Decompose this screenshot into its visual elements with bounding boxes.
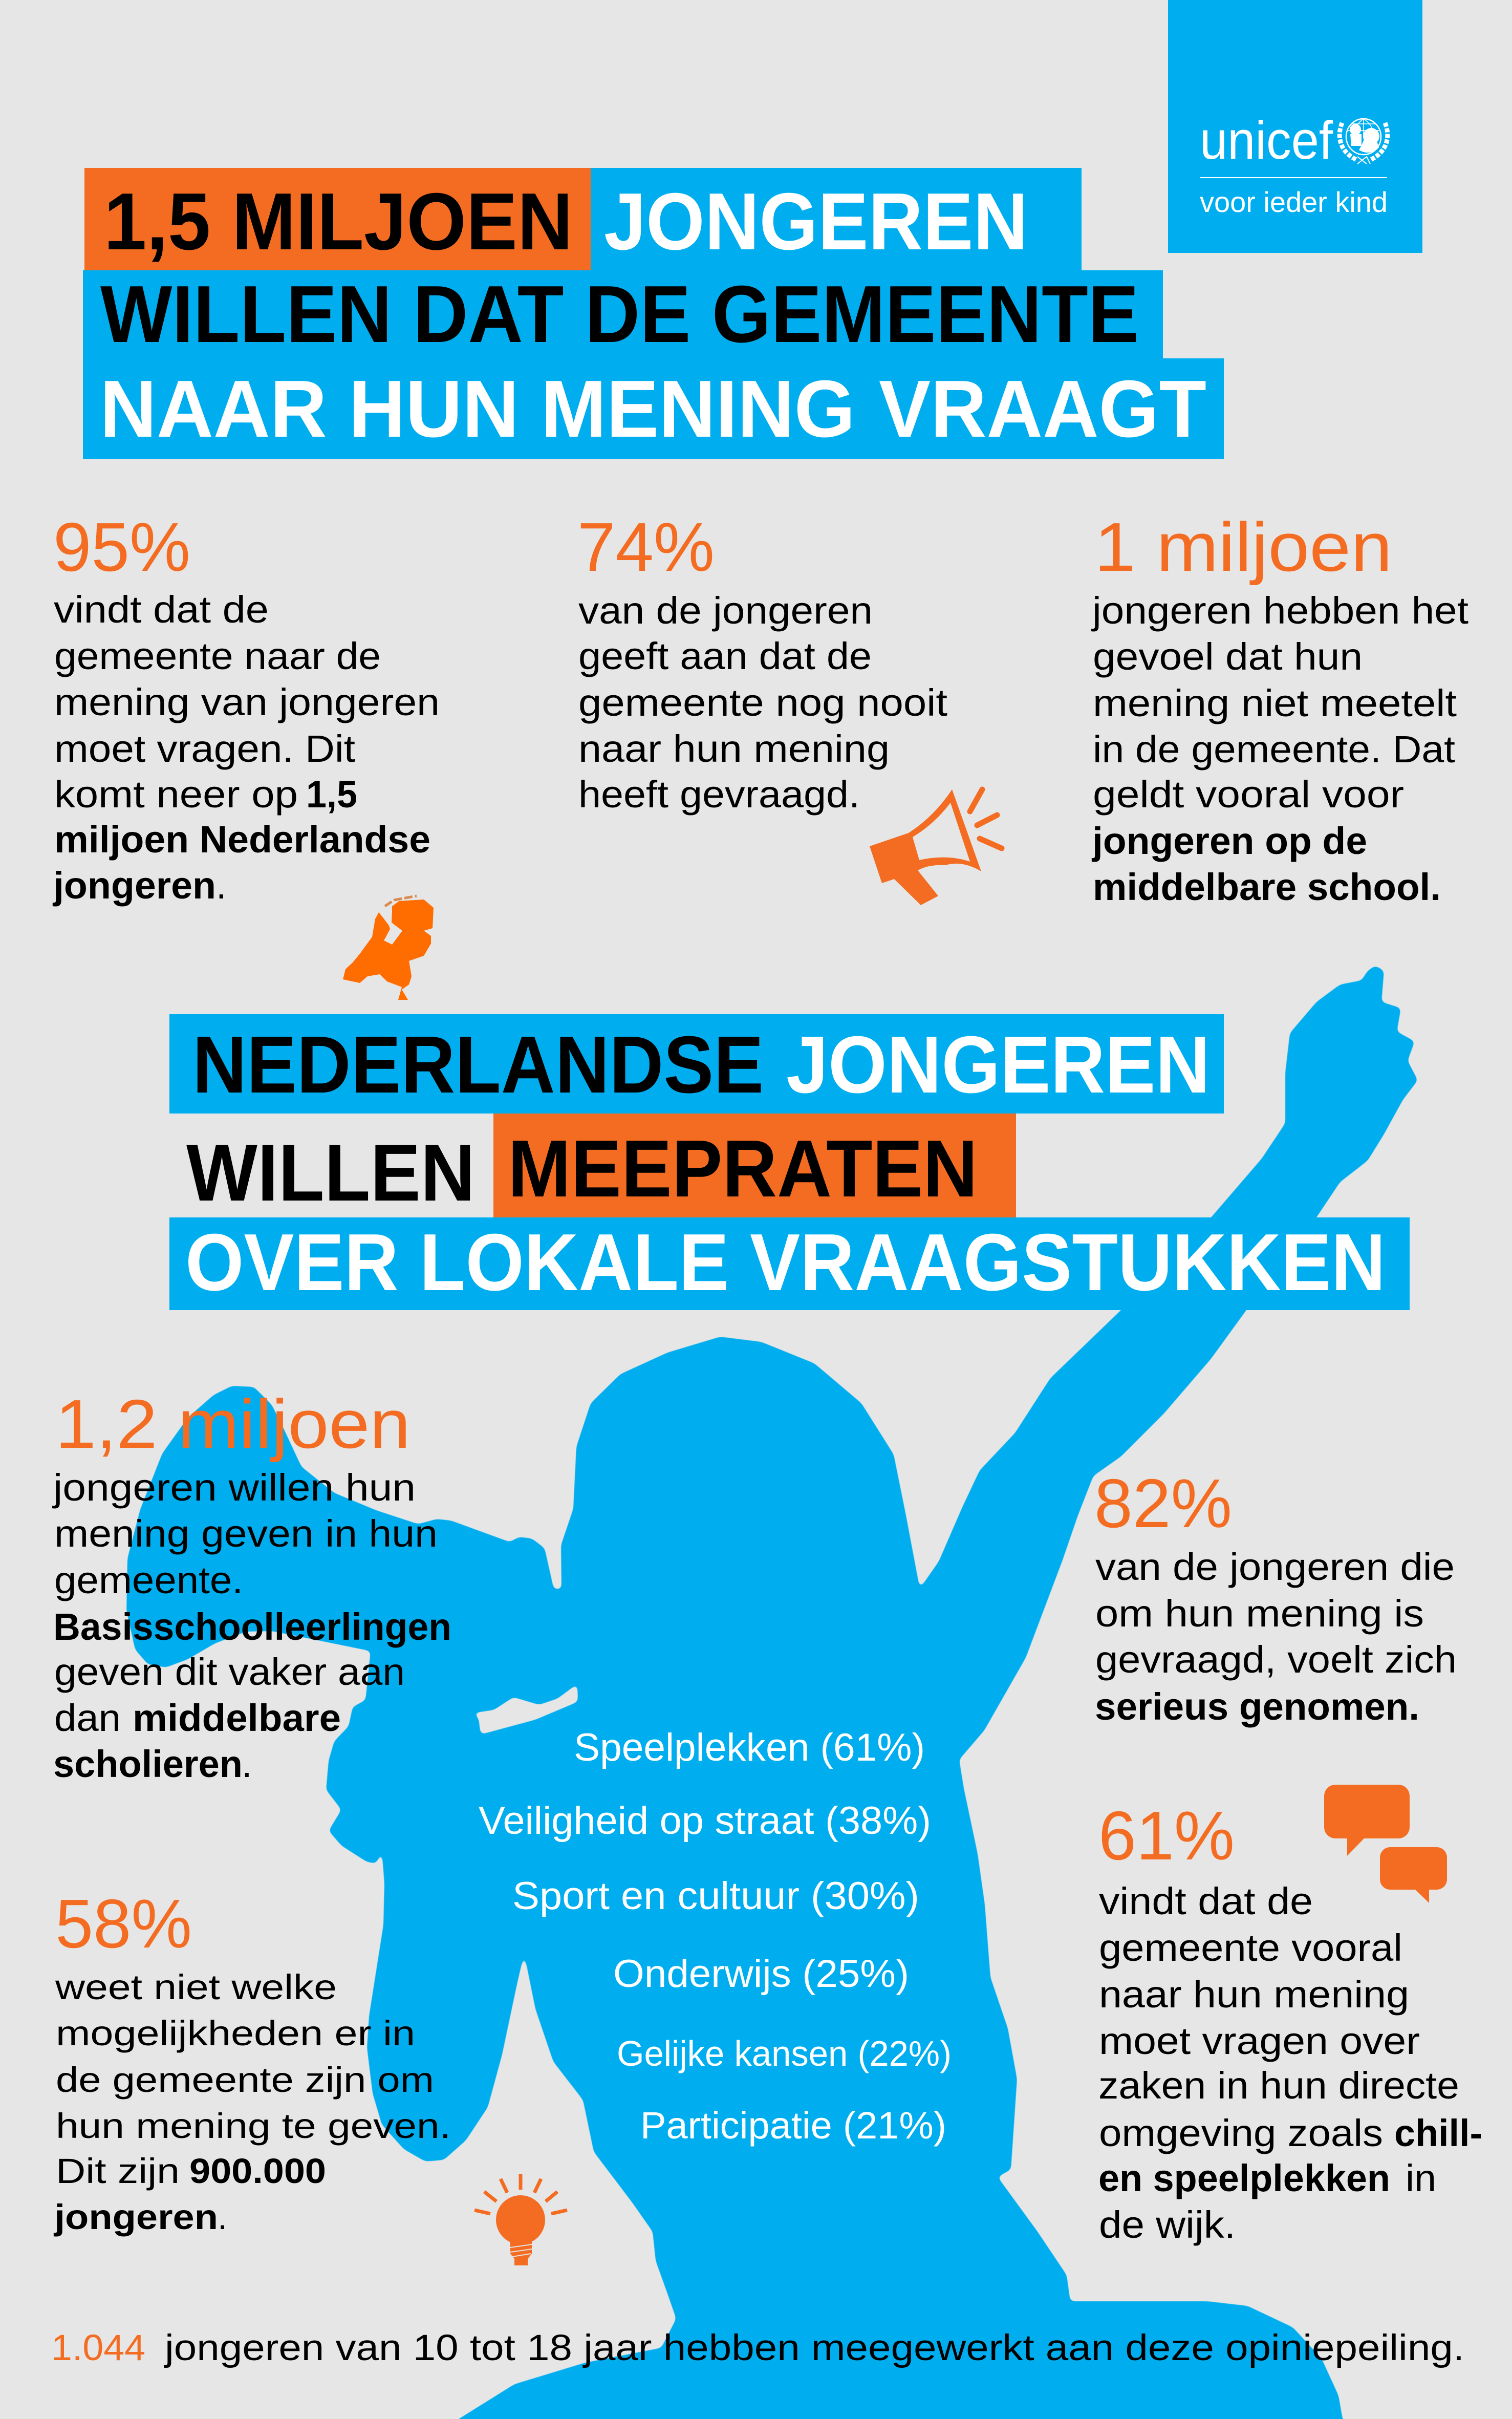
icon: light bulb (474, 2174, 567, 2265)
stat 1 miljoen body text: jongeren hebben het (1091, 589, 1468, 632)
title line 1 (104, 177, 1028, 267)
stat: 1,2 miljoen: 1,2 miljoen (55, 1385, 411, 1463)
stat 58% body text: jongeren (53, 2197, 218, 2237)
stat 1,2 miljoen body text: geven dit vaker aan (54, 1651, 405, 1693)
stat 1 miljoen body text: geldt vooral voor (1093, 773, 1404, 816)
stat 1,2 miljoen body text (52, 1466, 451, 1785)
stat 74% body text: van de jongeren (578, 589, 873, 632)
stat: 61%: 61% (1098, 1797, 1235, 1874)
stat 58% body text (53, 1967, 451, 2237)
stat: 58% (53, 1885, 451, 2237)
title banner (83, 168, 1224, 459)
silhouette: jumping child with megaphone (126, 966, 1418, 2419)
stat 95% body text (52, 588, 440, 907)
stat 95% body text: miljoen Nederlandse (54, 818, 430, 861)
stat 1 miljoen body text: mening niet meetelt (1093, 682, 1457, 724)
title line 2: WILLEN DAT DE GEMEENTE (100, 269, 1139, 359)
title line 3: NAAR HUN MENING (100, 364, 855, 454)
logo tagline: voor ieder kind (1200, 186, 1388, 218)
stat: 82% (1094, 1465, 1457, 1728)
stat 95% body text: mening van jongeren (54, 681, 440, 723)
stat 1 miljoen body text: in de gemeente. Dat (1093, 728, 1455, 770)
icon: map of the Netherlands (343, 896, 434, 1000)
logo wordmark: unicef (1200, 111, 1333, 170)
stat: 82%: 82% (1094, 1465, 1232, 1542)
stat: 1,2 miljoen (52, 1385, 451, 1785)
stat 82% body text: gevraagd, voelt zich (1095, 1638, 1457, 1681)
heading line 3: OVER LOKALE VRAAGSTUKKEN (185, 1217, 1386, 1308)
stat 95% body text: . (216, 864, 227, 907)
stat 74% body text: naar hun mening (578, 727, 890, 770)
stat 95% body text: komt neer op (54, 773, 298, 816)
stat 1 miljoen body text (1091, 589, 1468, 908)
stat 1 miljoen body text: jongeren op de (1091, 820, 1367, 862)
stat 61% body text: zaken in hun directe (1098, 2064, 1459, 2107)
stat: 74% (577, 508, 947, 816)
heading line 1 (192, 1020, 1210, 1110)
footer note: jongeren van 10 tot 18 jaar hebben meegewerkt aan deze opiniepeiling. (164, 2328, 1464, 2368)
stat 61% body text (1098, 1880, 1482, 2246)
stat 61% body text: in (1406, 2157, 1436, 2199)
stat 58% body text: mogelijkheden er in (56, 2014, 415, 2053)
second heading banner (169, 1014, 1410, 1310)
stat 61% body text: chill- (1394, 2112, 1482, 2154)
list: local issues young people want a say in (479, 1726, 952, 2147)
stat 74% body text: gemeente nog nooit (578, 681, 947, 724)
stat 61% body text: omgeving zoals (1099, 2112, 1383, 2154)
stat 1,2 miljoen body text: . (242, 1743, 252, 1785)
stat: 1 miljoen (1091, 508, 1468, 908)
stat 82% body text: om hun mening is (1095, 1592, 1424, 1635)
stat 95% body text: vindt dat de (54, 588, 269, 631)
stat 95% body text: gemeente naar de (54, 635, 381, 677)
stat 58% body text: weet niet welke (55, 1967, 337, 2007)
stat 58% body text: de gemeente zijn om (56, 2060, 434, 2100)
stat 1,2 miljoen body text: mening geven in hun (54, 1512, 438, 1555)
heading line 2 (186, 1124, 978, 1218)
stat 1 miljoen body text: gevoel dat hun (1093, 635, 1363, 678)
stat: 61% (1098, 1797, 1482, 2246)
stat 82% body text (1095, 1546, 1457, 1728)
stat 58% body text: . (218, 2197, 227, 2237)
stat: 95%: 95% (53, 508, 190, 586)
heading line 2: WILLEN (186, 1128, 475, 1218)
stat 82% body text: serieus genomen. (1095, 1685, 1419, 1728)
heading line 1: JONGEREN (786, 1020, 1210, 1110)
list item: Veiligheid op straat (38%) (479, 1799, 931, 1843)
stat 74% body text (578, 589, 947, 816)
icon: speech bubbles (1324, 1785, 1447, 1903)
stat 61% body text: gemeente vooral (1099, 1926, 1402, 1969)
list item: Gelijke kansen (22%) (617, 2033, 952, 2073)
stat 58% body text: hun mening te geven. (56, 2106, 451, 2146)
stat 95% body text: moet vragen. Dit (54, 727, 355, 770)
stat 61% body text: en speelplekken (1098, 2157, 1390, 2199)
stat 1,2 miljoen body text: dan (54, 1697, 121, 1739)
stat 95% body text: 1,5 (306, 773, 357, 816)
title line 1: 1,5 MILJOEN (104, 177, 573, 267)
stat 61% body text: vindt dat de (1099, 1880, 1313, 1922)
stat 1,2 miljoen body text: jongeren willen hun (52, 1466, 416, 1509)
stat 61% body text: naar hun mening (1099, 1973, 1409, 2016)
title line 3: VRAAGT (879, 364, 1206, 454)
stat: 95% (52, 508, 440, 907)
list item: Speelplekken (61%) (574, 1726, 925, 1769)
stat 1,2 miljoen body text: Basisschoolleerlingen (53, 1605, 451, 1648)
stat 58% body text: 900.000 (189, 2151, 326, 2191)
footer note: 1.044 (51, 2328, 145, 2368)
title line 1: JONGEREN (604, 177, 1028, 267)
stat 61% body text: moet vragen over (1099, 2020, 1420, 2062)
stat 61% body text: de wijk. (1099, 2203, 1236, 2246)
heading line 2: MEEPRATEN (508, 1124, 978, 1214)
stat 82% body text: van de jongeren die (1095, 1546, 1455, 1588)
list item: Participatie (21%) (640, 2104, 946, 2147)
stat 1,2 miljoen body text: gemeente. (54, 1559, 243, 1601)
stat: 58%: 58% (55, 1885, 192, 1962)
stat 58% body text: Dit zijn (56, 2151, 180, 2191)
stat 74% body text: heeft gevraagd. (578, 773, 860, 816)
icon: unicef emblem (1340, 119, 1388, 164)
stat 74% body text: geeft aan dat de (578, 635, 872, 677)
stat 95% body text: jongeren (52, 864, 216, 907)
stat 1 miljoen body text: middelbare school. (1093, 866, 1441, 908)
stat 1,2 miljoen body text: middelbare (133, 1697, 341, 1739)
stat: 74%: 74% (577, 508, 715, 586)
icon: megaphone (870, 789, 1002, 905)
list item: Sport en cultuur (30%) (512, 1874, 919, 1918)
logo panel: unicef (1168, 0, 1422, 253)
heading line 1: NEDERLANDSE (192, 1020, 764, 1110)
stat: 1 miljoen: 1 miljoen (1094, 508, 1392, 586)
stat 1,2 miljoen body text: scholieren (53, 1743, 243, 1785)
list item: Onderwijs (25%) (613, 1952, 909, 1996)
